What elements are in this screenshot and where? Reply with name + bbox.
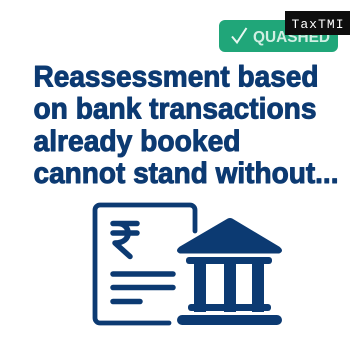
title: already booked: [34, 125, 240, 158]
title: on bank transactions: [34, 92, 316, 126]
watermark: TaxTMI: [285, 11, 350, 35]
icon: document with rupee and bank: [95, 205, 282, 325]
watermark: TaxTMI: TaxTMI: [292, 17, 344, 32]
badge: quashed: QUASHED: [253, 29, 330, 46]
title: [34, 60, 338, 190]
badge: quashed: [219, 20, 338, 52]
title: Reassessment based: [34, 60, 318, 94]
icon: document: [95, 205, 195, 323]
icon: bank: [177, 218, 282, 325]
title: cannot stand without...: [34, 157, 338, 190]
